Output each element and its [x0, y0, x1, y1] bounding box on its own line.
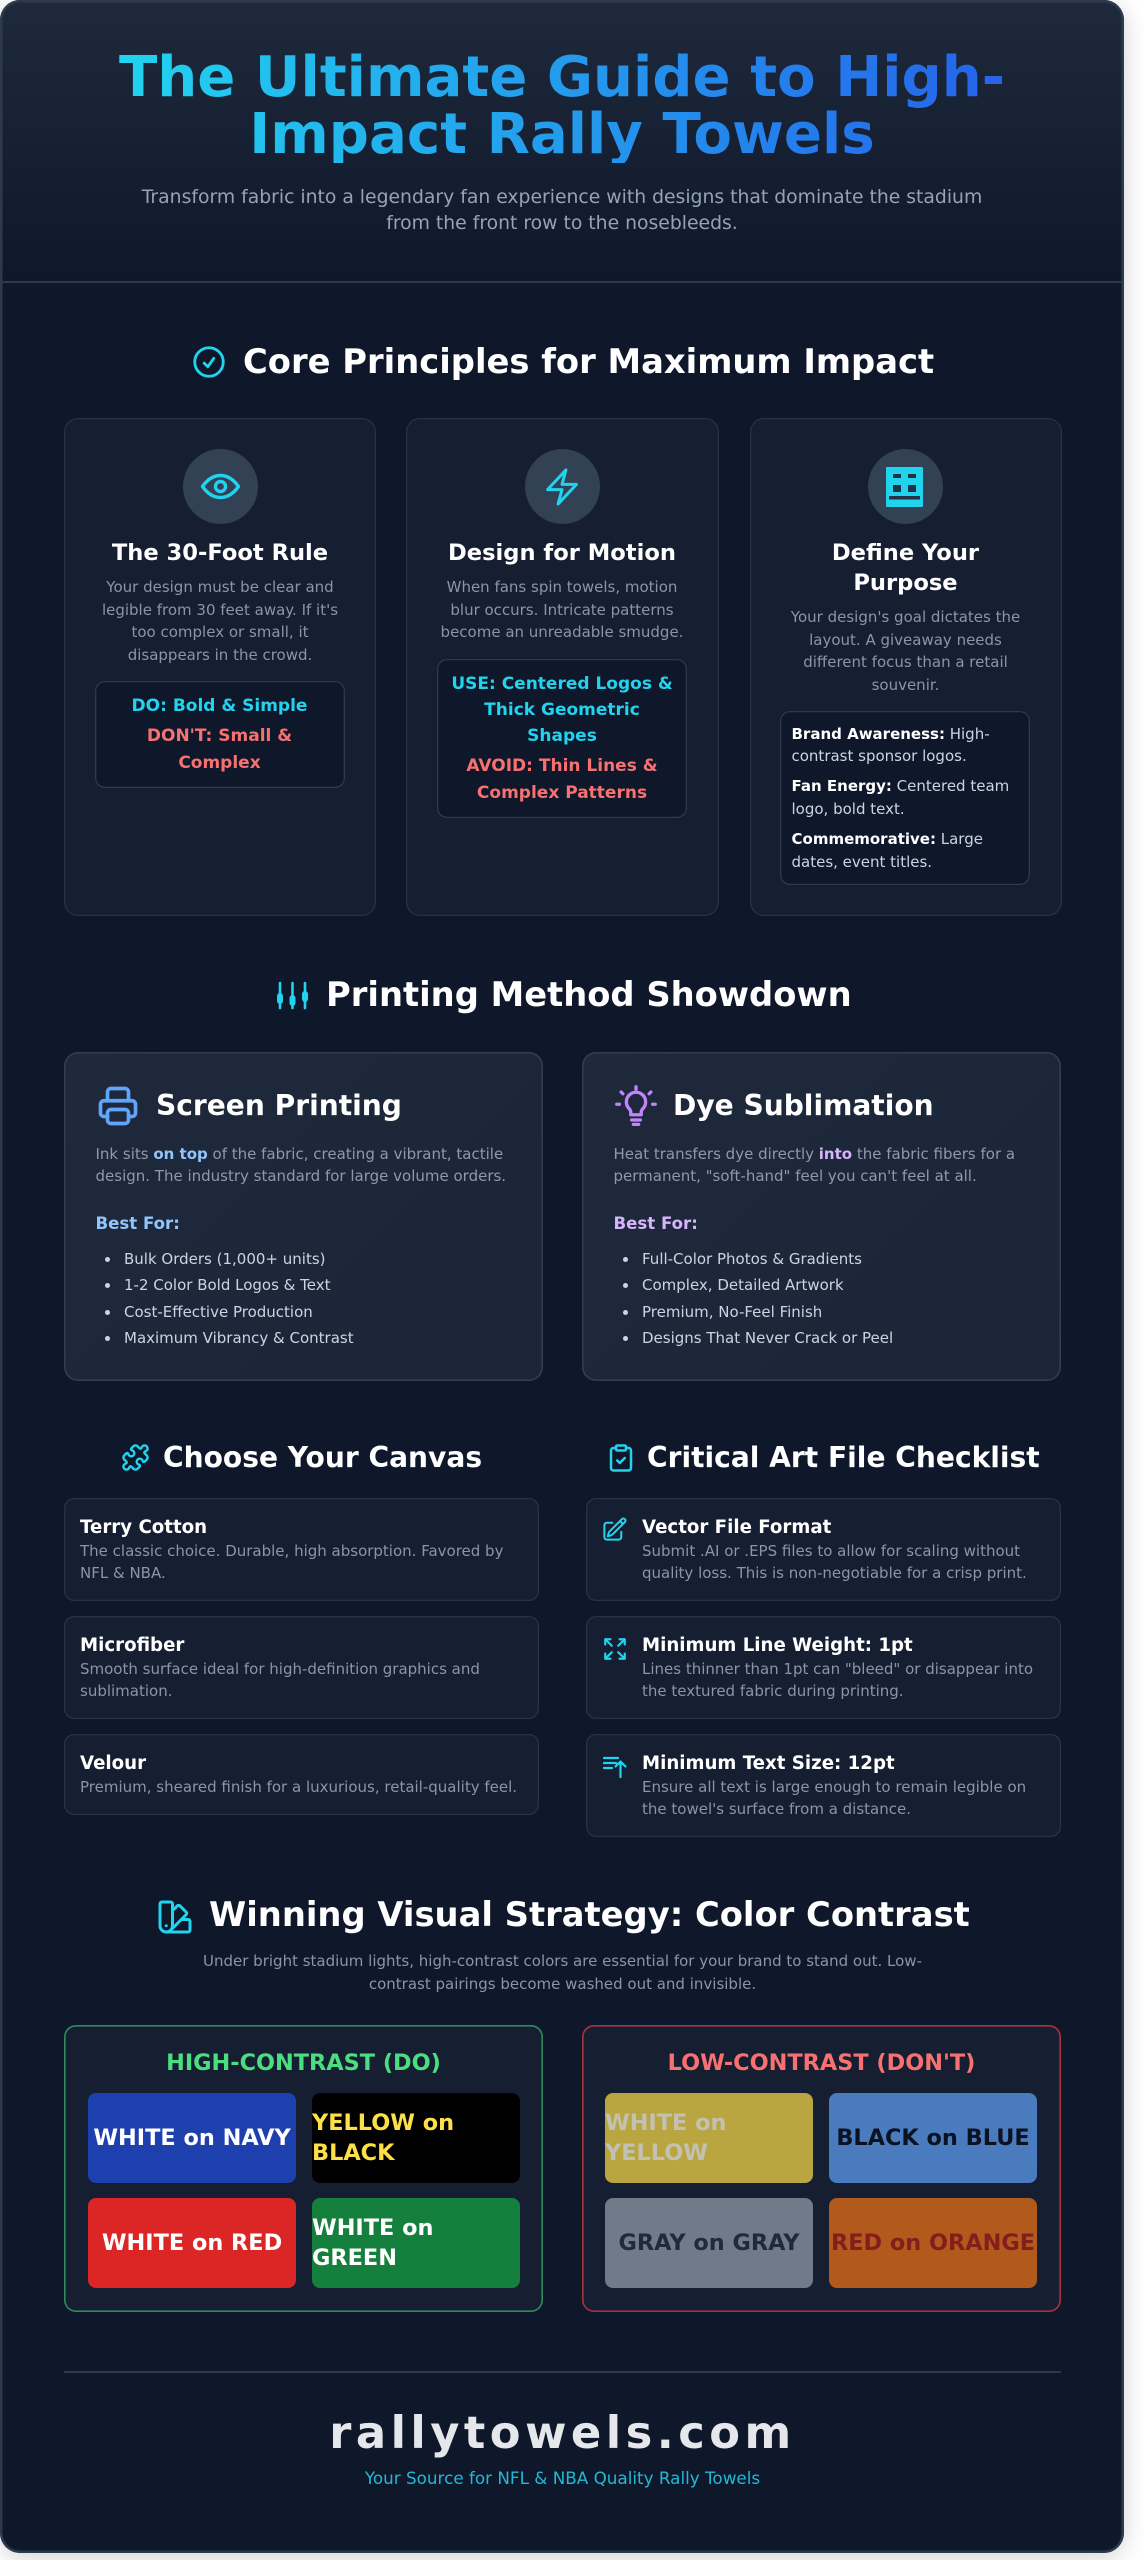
don't: [147, 726, 292, 772]
brand awareness: [792, 725, 990, 765]
swatch: yellow on black: YELLOW on: [312, 2110, 454, 2136]
commemorative: Commemorative: Large: [792, 830, 983, 848]
heading: choose your canvas: [122, 1441, 482, 1474]
commemorative: dates, event titles.: [792, 853, 932, 871]
best for list: [105, 1250, 354, 1347]
item description: quality loss. This is non-negotiable for a crisp print.: [642, 1564, 1027, 1582]
item title: Minimum Text Size: 12pt: [642, 1753, 895, 1774]
swatch: white on yellow: YELLOW: [605, 2140, 708, 2166]
subtitle: Transform fabric into a legendary fan experience with designs that dominate the stadium: [142, 186, 982, 208]
method description: [96, 1145, 506, 1185]
icon: printer: [98, 1086, 138, 1126]
heading text: Critical Art File Checklist: [647, 1441, 1040, 1474]
swatch: black on blue: BLACK on BLUE: [836, 2125, 1030, 2151]
best for list: Cost-Effective Production: [124, 1303, 313, 1321]
panel: vector file format: [586, 1498, 1061, 1601]
fan energy: [792, 777, 1009, 818]
method title: Screen Printing: [156, 1089, 402, 1122]
heading: core principles: [193, 342, 934, 381]
color contrast description: [203, 1952, 922, 1992]
don't: DON'T: Small &: [147, 726, 292, 746]
panel: design for motion: [406, 418, 719, 916]
icon: lightning bolt: [524, 449, 600, 524]
don't: Complex: [178, 752, 261, 772]
best for list: Bulk Orders (1,000+ units): [124, 1250, 326, 1268]
heading text: Choose Your Canvas: [163, 1441, 482, 1474]
color contrast description: contrast pairings become washed out and invisible.: [369, 1974, 756, 1992]
item description: The classic choice. Durable, high absorption. Favored by: [80, 1542, 503, 1560]
footer tagline: Your Source for NFL & NBA Quality Rally Towels: [365, 2468, 760, 2488]
icon: text size up: [602, 1756, 627, 1778]
item title: Vector File Format: [642, 1517, 831, 1538]
method description: Heat transfers dye directly into the fabric fibers for a: [614, 1145, 1015, 1163]
title: Impact Rally Towels: [249, 102, 875, 167]
item description: the towel's surface from a distance.: [642, 1800, 911, 1818]
method description: Ink sits on top of the fabric, creating a vibrant, tactile: [96, 1145, 503, 1163]
item title: Terry Cotton: [80, 1517, 207, 1538]
best for list: Designs That Never Crack or Peel: [642, 1329, 893, 1347]
use: Shapes: [527, 726, 597, 746]
card description: too complex or small, it: [132, 623, 308, 641]
icon: eye: [182, 449, 258, 524]
swatch: white on navy: WHITE on NAVY: [93, 2125, 291, 2151]
card description: souvenir.: [872, 676, 939, 694]
item description: [80, 1660, 480, 1700]
item description: Smooth surface ideal for high-definition graphics and: [80, 1660, 480, 1678]
method description: permanent, "soft-hand" feel you can't feel at all.: [614, 1167, 977, 1185]
card description: layout. A giveaway needs: [809, 630, 1002, 648]
item title: Minimum Line Weight: 1pt: [642, 1635, 913, 1656]
card description: [441, 578, 683, 641]
item description: Premium, sheared finish for a luxurious, retail-quality feel.: [80, 1778, 517, 1796]
panel: define your purpose: [750, 418, 1062, 916]
icon: light bulb: [615, 1085, 657, 1126]
heading text: Winning Visual Strategy: Color Contrast: [209, 1895, 970, 1934]
swatch: white on yellow: WHITE on: [605, 2110, 726, 2136]
brand awareness: Brand Awareness: High-: [792, 725, 990, 743]
card description: When fans spin towels, motion: [447, 578, 677, 596]
swatch: white on green: GREEN: [312, 2245, 397, 2271]
card description: legible from 30 feet away. If it's: [102, 600, 338, 618]
panel title: HIGH-CONTRAST (DO): [166, 2050, 441, 2076]
avoid: Complex Patterns: [477, 782, 647, 802]
swatch: gray on gray: GRAY on GRAY: [619, 2230, 799, 2256]
swatch: red on orange: [829, 2198, 1037, 2288]
panel: minimum text size: [586, 1734, 1061, 1837]
fan energy: Fan Energy: Centered team: [792, 777, 1009, 795]
best for list: [623, 1250, 893, 1347]
panel: high contrast do: [64, 2025, 543, 2312]
swatch: white on navy: [88, 2093, 296, 2183]
icon: check circle: [193, 346, 225, 378]
swatch: white on yellow: [605, 2093, 813, 2183]
card title: Purpose: [853, 570, 958, 596]
panel: screen printing: [64, 1052, 543, 1381]
panel: the 30-foot rule: [64, 418, 376, 916]
icon: expand arrows: [604, 1638, 626, 1660]
swatch: gray on gray: [605, 2198, 813, 2288]
swatch: white on red: WHITE on RED: [102, 2230, 282, 2256]
avoid: AVOID: Thin Lines &: [466, 756, 658, 776]
panel: dye sublimation: [582, 1052, 1061, 1381]
best for list: Full-Color Photos & Gradients: [642, 1250, 862, 1268]
subtitle: [142, 186, 982, 234]
swatch: white on green: [312, 2198, 520, 2288]
icon: sliders: [277, 982, 308, 1010]
item description: [642, 1778, 1026, 1818]
purpose list box: [780, 711, 1030, 885]
card description: disappears in the crowd.: [128, 646, 312, 664]
best for list: Maximum Vibrancy & Contrast: [124, 1329, 354, 1347]
item description: Submit .AI or .EPS files to allow for scaling without: [642, 1542, 1020, 1560]
item description: NFL & NBA.: [80, 1564, 166, 1582]
item description: the textured fabric during printing.: [642, 1682, 904, 1700]
icon: swatch: [158, 1900, 192, 1934]
swatch: white on green: WHITE on: [312, 2215, 433, 2241]
item title: Velour: [80, 1753, 146, 1774]
color contrast description: Under bright stadium lights, high-contrast colors are essential for your brand to stand out. Low-: [203, 1952, 922, 1970]
heading: winning visual strategy: [158, 1895, 970, 1934]
card description: [790, 608, 1020, 694]
title: [118, 49, 1006, 163]
item description: Lines thinner than 1pt can "bleed" or disappear into: [642, 1660, 1033, 1678]
card description: become an unreadable smudge.: [441, 623, 683, 641]
avoid: [466, 756, 658, 802]
card title: The 30-Foot Rule: [112, 540, 328, 566]
icon: pencil square: [603, 1518, 626, 1541]
swatch: yellow on black: BLACK: [312, 2140, 394, 2166]
panel: microfiber: [64, 1616, 539, 1719]
card description: Your design must be clear and: [106, 578, 334, 596]
item description: [642, 1542, 1027, 1582]
header band: [0, 0, 1124, 283]
swatch: white on red: [88, 2198, 296, 2288]
card title: Define Your: [832, 540, 979, 566]
commemorative: [792, 830, 983, 871]
heading: printing method showdown: [277, 975, 852, 1014]
item description: Ensure all text is large enough to remain legible on: [642, 1778, 1026, 1796]
best for list: Premium, No-Feel Finish: [642, 1303, 822, 1321]
heading: critical art file checklist: [610, 1441, 1040, 1474]
swatch: yellow on black: [312, 2093, 520, 2183]
best for label: Best For:: [614, 1214, 698, 1233]
footer brand: rallytowels.com: [329, 2406, 796, 2459]
card title: [832, 540, 979, 596]
best for list: Complex, Detailed Artwork: [642, 1276, 844, 1294]
subtitle: from the front row to the nosebleeds.: [386, 212, 738, 234]
method description: [614, 1145, 1015, 1185]
best for label: Best For:: [96, 1214, 180, 1233]
use: USE: Centered Logos &: [451, 674, 673, 694]
best for list: 1-2 Color Bold Logos & Text: [124, 1276, 330, 1294]
do: DO: Bold & Simple: [132, 696, 307, 716]
item description: [80, 1542, 503, 1582]
method title: Dye Sublimation: [673, 1089, 934, 1122]
fan energy: logo, bold text.: [792, 800, 905, 818]
card title: Design for Motion: [448, 540, 676, 566]
title: The Ultimate Guide to High-: [119, 45, 1005, 110]
footer: [64, 2371, 1061, 2491]
method description: design. The industry standard for large volume orders.: [96, 1167, 506, 1185]
icon: clipboard check: [610, 1444, 632, 1472]
panel: terry cotton: [64, 1498, 539, 1601]
item description: [642, 1660, 1033, 1700]
brand awareness: contrast sponsor logos.: [792, 747, 967, 765]
card description: different focus than a retail: [803, 653, 1008, 671]
use: Thick Geometric: [484, 700, 640, 720]
item description: sublimation.: [80, 1682, 172, 1700]
panel: minimum line weight: [586, 1616, 1061, 1719]
swatch: red on orange: RED on ORANGE: [831, 2230, 1035, 2256]
heading text: Core Principles for Maximum Impact: [243, 342, 934, 381]
panel: low contrast don't: [582, 2025, 1061, 2312]
heading text: Printing Method Showdown: [326, 975, 852, 1014]
card description: blur occurs. Intricate patterns: [450, 600, 674, 618]
icon: layout grid: [868, 449, 943, 524]
card description: [102, 578, 338, 664]
card description: Your design's goal dictates the: [791, 608, 1020, 626]
icon: puzzle piece: [122, 1444, 149, 1471]
do and don't box: [94, 681, 344, 788]
item title: Microfiber: [80, 1635, 184, 1656]
swatch: black on blue: [829, 2093, 1037, 2183]
use and avoid box: [437, 659, 687, 818]
panel title: LOW-CONTRAST (DON'T): [668, 2050, 975, 2076]
use: [451, 674, 673, 746]
panel: velour: [64, 1734, 539, 1815]
